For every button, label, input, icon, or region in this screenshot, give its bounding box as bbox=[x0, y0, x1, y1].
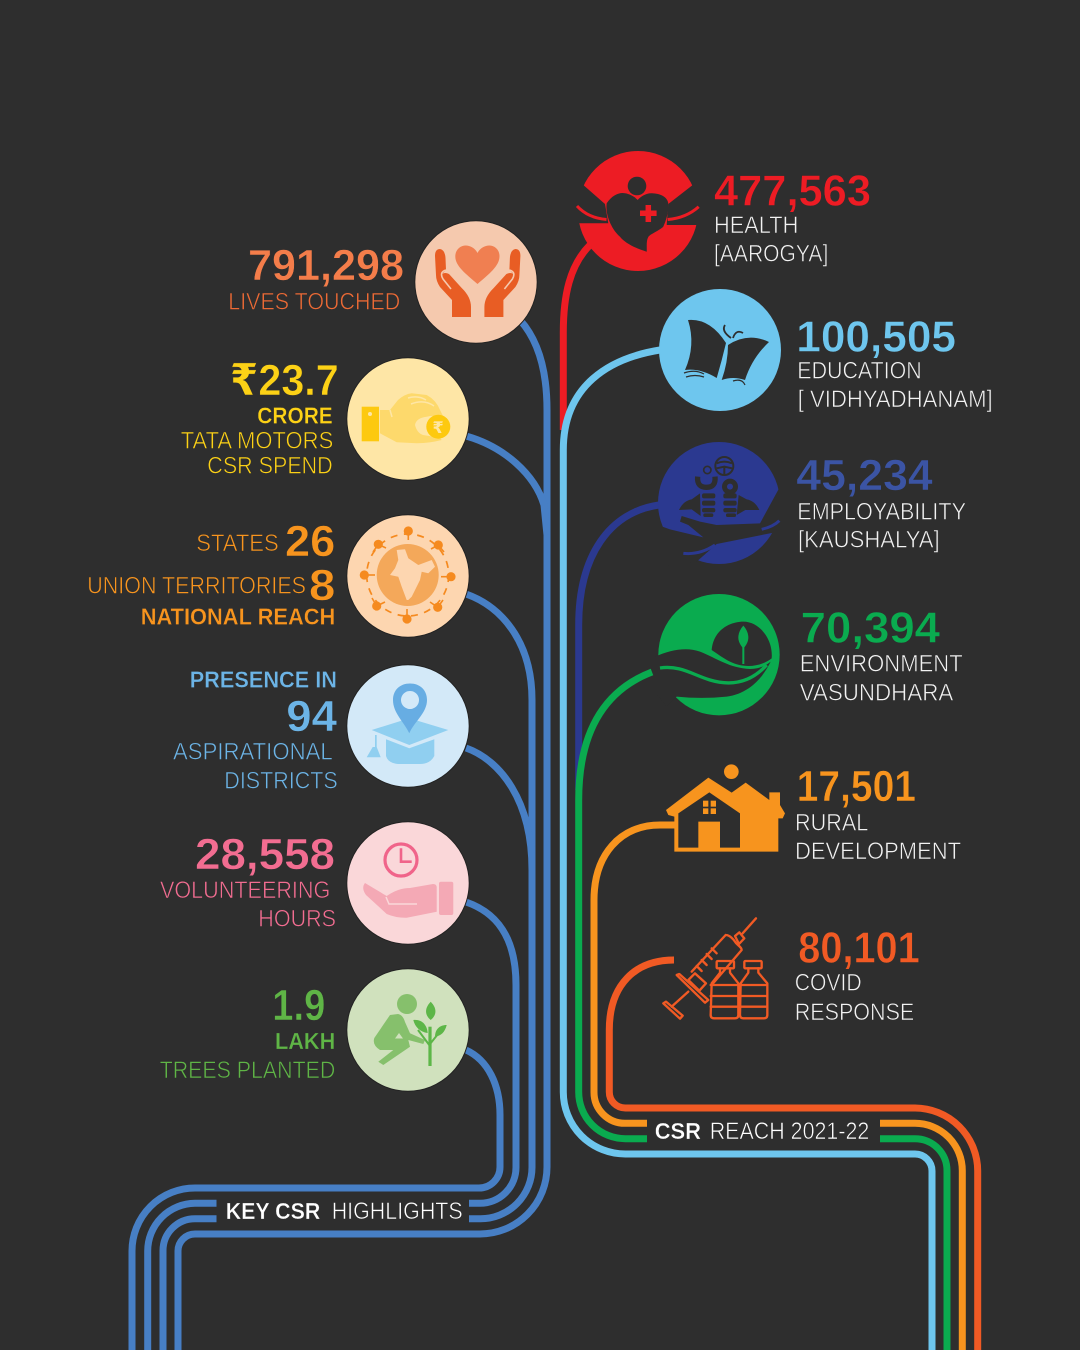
panel: lives touched bbox=[228, 221, 537, 343]
label: kaushalya: [KAUSHALYA] bbox=[798, 527, 940, 554]
label: response: RESPONSE bbox=[795, 999, 914, 1026]
icon: hand with rupee coin bbox=[347, 358, 469, 480]
number: 17,501: 17,501 bbox=[797, 762, 916, 811]
label: volunteering: VOLUNTEERING bbox=[160, 877, 330, 904]
panel: volunteering hours bbox=[160, 822, 469, 944]
heading: key CSR highlights: KEY CSR bbox=[226, 1198, 320, 1224]
panel: health bbox=[570, 151, 871, 271]
panel: rural development bbox=[666, 762, 961, 865]
label: lakh: LAKH bbox=[275, 1028, 335, 1054]
panel: national reach bbox=[87, 515, 469, 637]
label: trees planted: TREES PLANTED bbox=[160, 1057, 335, 1084]
icon: India map globe bbox=[347, 515, 469, 637]
label: CSR spend: CSR SPEND bbox=[207, 453, 333, 480]
icon: hand with rupee coin: ₹ bbox=[432, 420, 444, 437]
panel: covid response bbox=[663, 918, 920, 1026]
connector lines: key CSR highlights bbox=[132, 320, 547, 1350]
label: crore: CRORE bbox=[257, 402, 333, 428]
icon: caring hands with heart bbox=[415, 221, 537, 343]
label: environment: ENVIRONMENT bbox=[800, 651, 963, 678]
panel: aspirational districts bbox=[173, 665, 469, 794]
label: lives touched: LIVES TOUCHED bbox=[228, 288, 400, 315]
number: 477,563: 477,563 bbox=[714, 167, 871, 216]
label: Tata Motors: TATA MOTORS bbox=[181, 427, 333, 454]
heading: CSR reach 2021-22: REACH 2021-22 bbox=[710, 1118, 869, 1145]
number: 80,101: 80,101 bbox=[798, 923, 920, 972]
number: 70,394: 70,394 bbox=[801, 604, 941, 653]
label: rural: RURAL bbox=[795, 809, 868, 836]
label: vidhyadhanam: [ VIDHYADHANAM] bbox=[798, 386, 993, 413]
number: 26: 26 bbox=[285, 517, 335, 566]
label: vasundhara: VASUNDHARA bbox=[800, 680, 953, 707]
number: rupee 23.7: ₹23.7 bbox=[230, 356, 339, 405]
icon: house bbox=[666, 764, 785, 852]
label: presence in: PRESENCE IN bbox=[190, 667, 337, 693]
panel: education bbox=[659, 289, 993, 413]
panel: environment bbox=[653, 594, 963, 715]
label: national reach: NATIONAL REACH bbox=[141, 603, 335, 629]
label: hours: HOURS bbox=[258, 906, 336, 933]
label: employability: EMPLOYABILITY bbox=[797, 498, 966, 525]
panel: trees planted bbox=[160, 969, 469, 1091]
number: 45,234: 45,234 bbox=[796, 451, 933, 500]
icon: open book bbox=[659, 289, 781, 411]
icon: leaf and landscape bbox=[653, 594, 780, 715]
label: states: STATES bbox=[196, 530, 279, 557]
number: 28,558: 28,558 bbox=[195, 830, 335, 879]
label: districts: DISTRICTS bbox=[224, 767, 338, 794]
icon: clock over open hand bbox=[347, 822, 469, 944]
icon: graduation cap with location pin bbox=[347, 665, 469, 787]
connector lines: CSR reach bbox=[563, 245, 978, 1350]
number: 791,298: 791,298 bbox=[248, 241, 404, 290]
label: aarogya: [AAROGYA] bbox=[714, 241, 828, 268]
heading: CSR reach 2021-22: CSR bbox=[655, 1118, 701, 1144]
icon: hand holding tools bbox=[650, 442, 793, 567]
label: education: EDUCATION bbox=[797, 357, 922, 384]
label: development: DEVELOPMENT bbox=[795, 838, 961, 865]
number: 8: 8 bbox=[309, 561, 335, 610]
number: 100,505: 100,505 bbox=[796, 313, 956, 362]
icon: heart with person and cross bbox=[570, 151, 705, 271]
label: aspirational: ASPIRATIONAL bbox=[173, 738, 333, 765]
heading: CSR reach 2021-22 bbox=[655, 1118, 869, 1145]
label: union territories: UNION TERRITORIES bbox=[87, 572, 306, 599]
heading: key CSR highlights: HIGHLIGHTS bbox=[332, 1198, 463, 1225]
panel: CSR spend bbox=[181, 356, 469, 480]
label: covid: COVID bbox=[795, 970, 862, 997]
panel: employability bbox=[650, 442, 966, 567]
icon: person planting a sapling bbox=[347, 969, 469, 1091]
heading: key CSR highlights bbox=[226, 1198, 463, 1225]
number: 1.9: 1.9 bbox=[272, 981, 325, 1030]
label: health: HEALTH bbox=[714, 212, 798, 239]
number: 94: 94 bbox=[286, 692, 338, 741]
icon: syringe and vials bbox=[663, 918, 767, 1019]
